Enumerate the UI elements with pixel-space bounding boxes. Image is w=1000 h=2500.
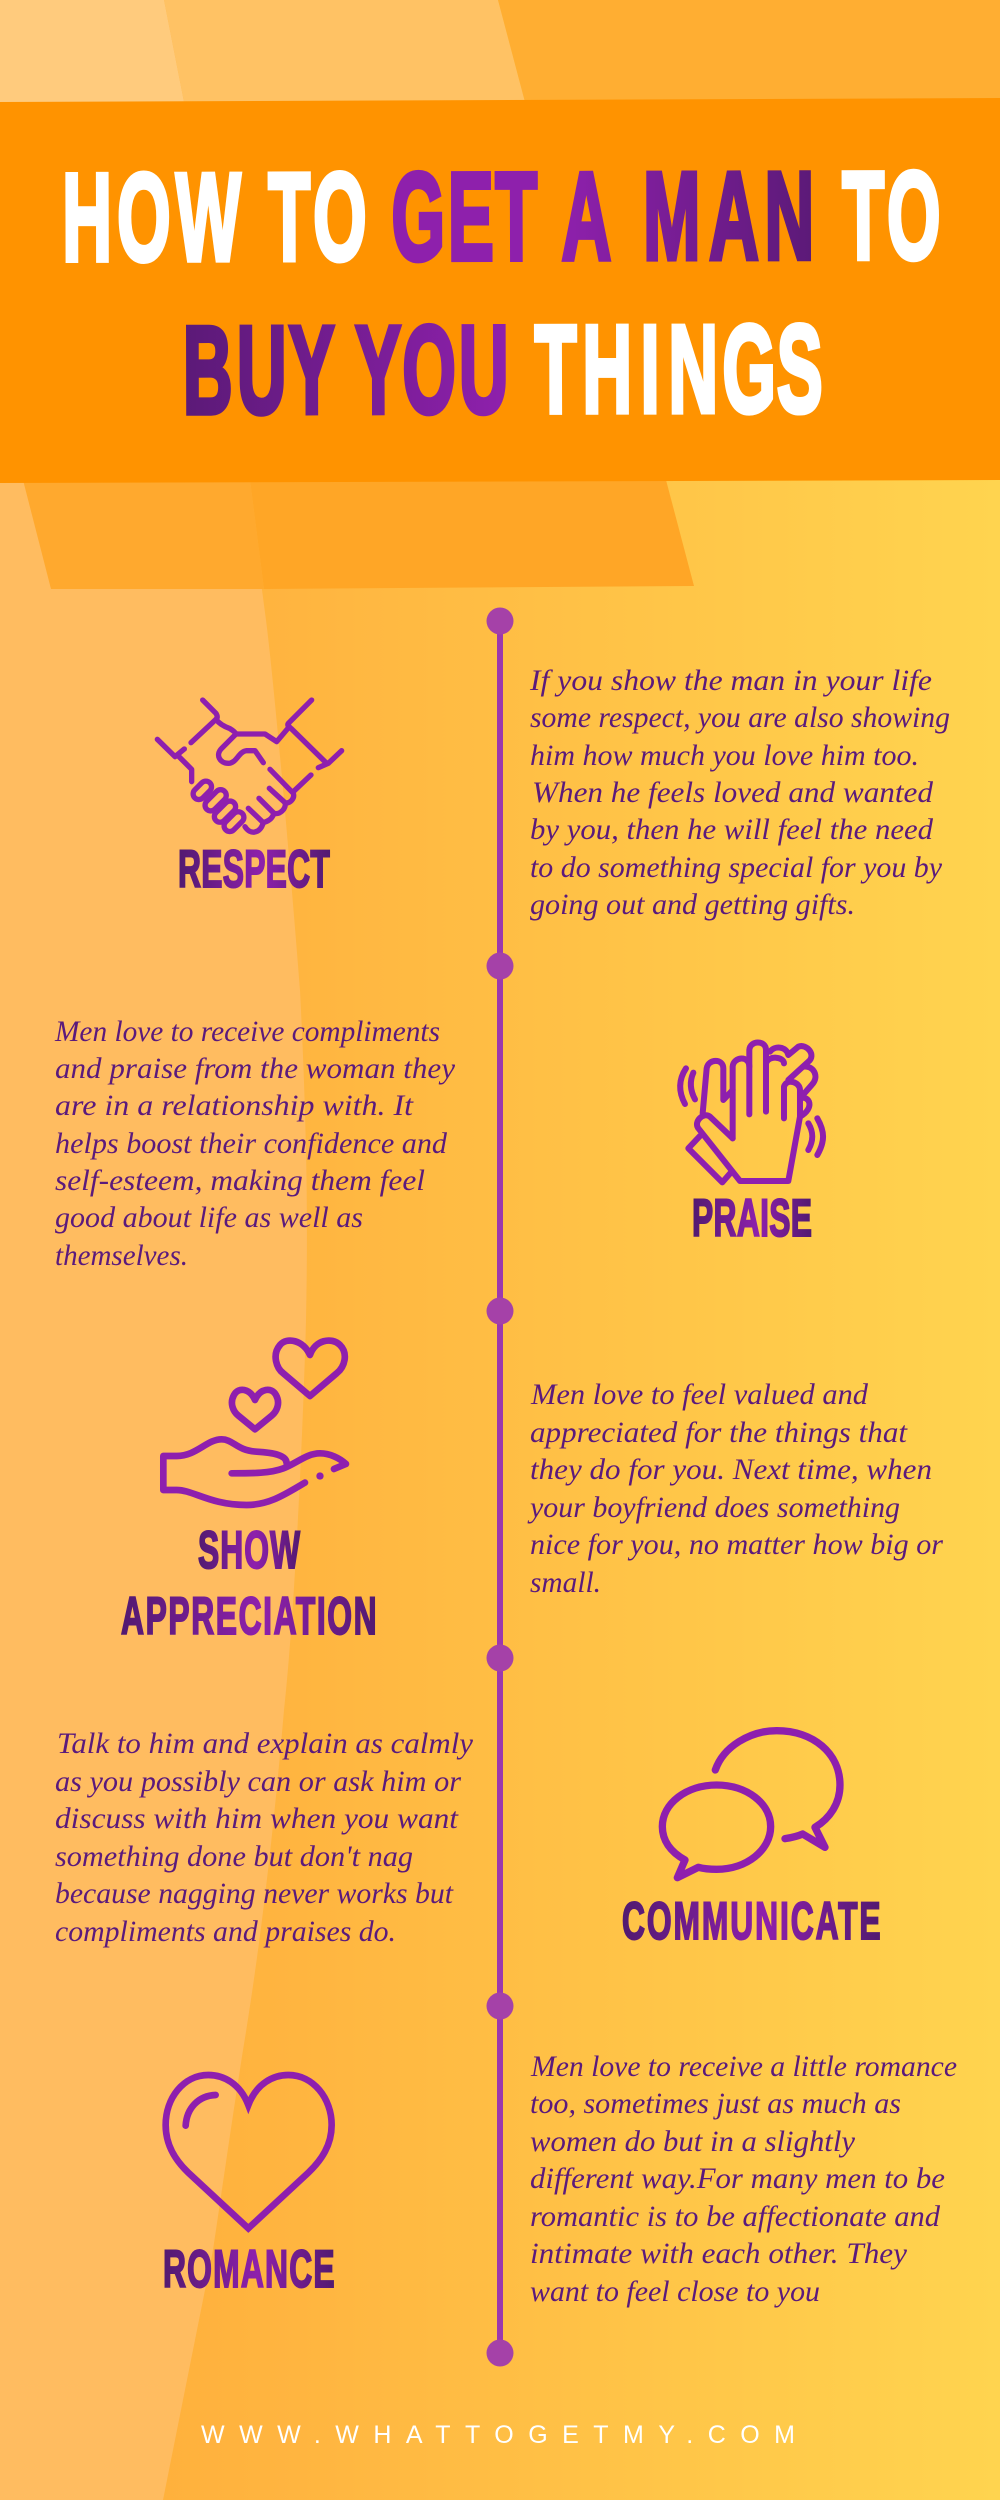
text block: romance: different way.For many men to be: [530, 2162, 945, 2195]
icon: handshake: [157, 700, 342, 834]
heading: romance: ROMANCE: [163, 2240, 335, 2299]
text block: praise: and praise from the woman they: [55, 1052, 456, 1085]
text block: show appreciation: [527, 1378, 943, 1599]
text block: praise: themselves.: [55, 1239, 188, 1272]
text block: communicate: [55, 1727, 474, 1948]
text block: respect: going out and getting gifts.: [530, 888, 855, 921]
text block: communicate: compliments and praises do.: [55, 1915, 396, 1948]
text block: praise: good about life as well as: [55, 1201, 363, 1234]
text block: show appreciation: your boyfriend does something: [527, 1491, 900, 1524]
panel: respect: [157, 664, 950, 921]
text block: show appreciation: they do for you. Next time, when: [530, 1453, 932, 1486]
text block: communicate: as you possibly can or ask him or: [55, 1765, 461, 1798]
text block: respect: If you show the man in your life: [529, 664, 932, 697]
title: GET: [391, 148, 537, 287]
heading: show appreciation: SHOW: [198, 1521, 301, 1580]
text block: praise: self-esteem, making them feel: [55, 1164, 425, 1197]
text block: communicate: something done but don't nag: [55, 1840, 413, 1873]
text block: show appreciation: small.: [530, 1566, 601, 1599]
title: [62, 147, 941, 441]
text block: respect: [529, 664, 950, 921]
text block: praise: are in a relationship with. It: [55, 1089, 414, 1122]
title: TO: [842, 147, 941, 286]
heading: show appreciation: [121, 1521, 377, 1646]
text block: romance: want to feel close to you: [530, 2275, 820, 2308]
text block: respect: When he feels loved and wanted: [532, 776, 934, 809]
heading: show appreciation: APPRECIATION: [121, 1587, 377, 1646]
text block: respect: him how much you love him too.: [530, 739, 919, 772]
title: BUY: [183, 301, 335, 440]
icon: heart: [166, 2075, 332, 2228]
text block: praise: helps boost their confidence and: [55, 1127, 448, 1160]
title band: [0, 98, 1000, 483]
panel: show appreciation: [121, 1341, 943, 1646]
text block: communicate: discuss with him when you want: [55, 1802, 459, 1835]
text block: communicate: Talk to him and explain as calmly: [57, 1727, 474, 1760]
heading: communicate: COMMUNICATE: [622, 1892, 881, 1951]
title: MAN: [643, 147, 814, 286]
text block: show appreciation: Men love to feel valued and: [530, 1378, 869, 1411]
text block: respect: by you, then he will feel the need: [530, 813, 934, 846]
heading: praise: PRAISE: [692, 1189, 812, 1248]
text block: respect: some respect, you are also showing: [530, 701, 950, 734]
title: A: [561, 148, 611, 287]
text block: show appreciation: appreciated for the things that: [530, 1416, 908, 1449]
icon: speech bubbles: [662, 1731, 840, 1878]
text block: praise: [54, 1015, 456, 1272]
text block: romance: romantic is to be affectionate and: [530, 2200, 941, 2233]
timeline: [486, 608, 514, 2366]
panel: communicate: [55, 1727, 881, 1951]
title: THINGS: [535, 300, 823, 440]
text block: romance: [530, 2050, 957, 2308]
title: YOU: [355, 301, 509, 440]
title: HOW: [62, 149, 241, 288]
text block: romance: women do but in a slightly: [530, 2125, 856, 2158]
text block: show appreciation: nice for you, no matter how big or: [530, 1528, 943, 1561]
text block: romance: intimate with each other. They: [530, 2237, 908, 2270]
footer url: WWW.WHATTOGETMY.COM: [201, 2421, 795, 2449]
icon: hand with hearts: [163, 1341, 346, 1505]
icon: clapping hands: [680, 1042, 823, 1182]
panel: romance: [163, 2050, 957, 2308]
title: TO: [268, 148, 367, 287]
text block: respect: to do something special for you by: [530, 851, 943, 884]
text block: romance: too, sometimes just as much as: [530, 2087, 901, 2120]
panel: praise: [54, 1015, 823, 1272]
text block: praise: Men love to receive compliments: [54, 1015, 440, 1048]
text block: communicate: because nagging never works but: [55, 1877, 454, 1910]
text block: romance: Men love to receive a little romance: [530, 2050, 957, 2083]
heading: respect: RESPECT: [178, 840, 330, 899]
